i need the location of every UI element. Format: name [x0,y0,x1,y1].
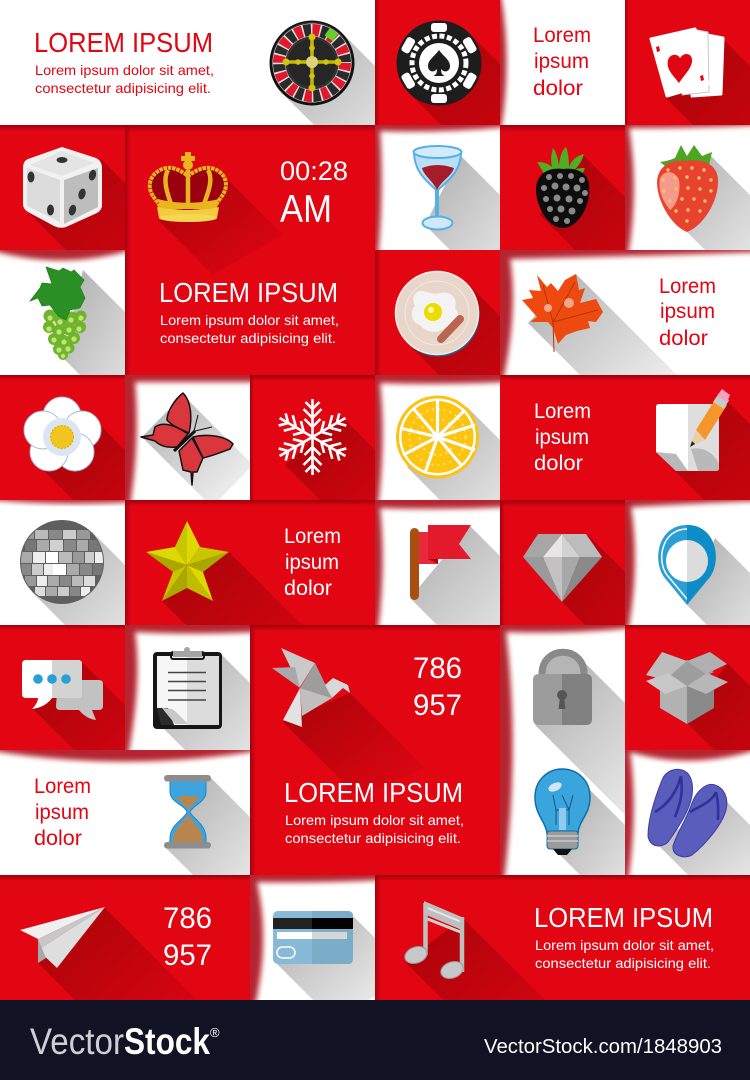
panel: clipboard [125,625,250,750]
title heading: LOREM IPSUM [34,27,213,58]
text block: ipsum [285,551,339,574]
butterfly shadow [142,395,253,507]
bulb shadow [557,788,658,922]
panel: snowflake [250,375,375,500]
panel: grapes [0,250,125,375]
numbers: 957 [413,689,462,722]
pin shadow [687,538,750,675]
panel: butterfly [125,375,250,500]
text block: dolor [534,452,583,475]
icon: map pin [658,525,716,605]
footer bar [0,1000,750,1080]
panel: dice [0,125,125,250]
footer logo [30,1021,220,1062]
footer logo: Stock [124,1021,210,1062]
icon: grapes [30,267,86,360]
icon: flag [410,525,471,600]
icon: disco ball [20,520,104,604]
icon: chat bubbles [22,660,103,720]
sub text [285,812,464,846]
dice shadow [25,160,182,289]
plate shadow [407,283,557,433]
icon: paper plane [20,907,105,968]
icon: roulette wheel [270,20,354,106]
numbers: 786 [413,652,462,685]
panel: star with text [125,500,375,625]
lock shadow [535,663,685,825]
text block: Lorem [284,525,341,548]
subtitle text [35,62,214,96]
box shadow [687,663,750,793]
flower shadow [43,425,180,550]
strawberry shadow [665,155,750,290]
grapes shadow [63,270,163,438]
panel: playing cards [625,0,750,125]
panel: map pin [625,500,750,625]
subtitle text: Lorem ipsum dolor sit amet, [35,62,214,78]
star shadow [162,552,304,676]
panel: lock and light bulb [500,625,625,875]
sub text: consectetur adipisicing elit. [160,330,336,346]
panel: title with roulette [34,20,375,125]
am label: AM [280,188,332,231]
panel: paper plane with numbers [0,875,250,1000]
chat shadow [32,662,152,778]
text block: ipsum [535,426,589,449]
panel: note and pencil [500,375,750,500]
text block: ipsum [534,50,589,73]
flip flop shadow [655,802,750,902]
footer url: VectorStock.com/1848903 [484,1036,722,1058]
blackberry shadow [540,155,663,295]
plane shadow [38,908,205,1063]
icon: lemon [396,396,479,478]
icon: dice [23,147,102,228]
icon: snowflake [275,399,350,475]
sub text: consectetur adipisicing elit. [535,955,711,971]
heading: LOREM IPSUM [284,777,463,808]
footer logo: Vector [30,1021,124,1062]
icon: cardboard box [646,652,728,724]
sub text: Lorem ipsum dolor sit amet, [535,937,714,953]
icon: casino chip [396,20,482,106]
clipboard shadow [157,655,292,792]
roulette shadow [282,33,432,183]
numbers [163,902,212,972]
text block [659,275,716,350]
icon: star [146,521,229,601]
icon: butterfly [141,393,233,485]
numbers: 786 [163,902,212,935]
icon: crown [150,152,226,222]
card shadow [275,913,410,1022]
crown shadow [158,180,283,275]
text block: dolor [659,327,708,350]
numbers [413,652,462,722]
panel: flag [375,500,500,625]
icon: note with pencil [656,389,730,471]
subtitle text: consectetur adipisicing elit. [35,80,211,96]
panel: maple leaf with text [500,250,750,375]
disco shadow [32,532,172,672]
icon: credit card [273,911,353,964]
icon: diamond [523,534,602,602]
panel: blackberry [500,125,625,250]
panel: flip flops [625,750,750,875]
sub text [160,312,339,346]
panel: diamond [500,500,625,625]
icon: flower [24,397,101,471]
sub text: Lorem ipsum dolor sit amet, [160,312,339,328]
text block [34,775,91,850]
text block: Lorem [34,775,91,798]
panel: strawberry [625,125,750,250]
heading: LOREM IPSUM [159,277,338,308]
panel: chat bubbles [0,625,125,750]
text block: dolor [284,577,332,600]
leaf shadow [528,274,676,423]
music note shadow [405,918,573,1072]
icon: hourglass [164,775,211,848]
hourglass shadow [165,777,280,917]
diamond shadow [562,535,658,672]
icon: padlock [533,652,592,725]
icon: origami bird [272,648,350,727]
sub text: Lorem ipsum dolor sit amet, [285,812,464,828]
panel: wine glass [375,125,500,250]
panel: hourglass with text [0,750,250,875]
text block [534,400,591,475]
text block: dolor [34,827,82,850]
icon: flip flops [648,769,727,857]
panel: fried egg plate [375,250,500,375]
snowflake shadow [285,415,400,525]
note shadow [657,402,750,543]
flag shadow [410,526,550,678]
text block: ipsum [660,300,715,323]
panel: origami bird with numbers and title [250,625,500,875]
icon: plate with egg [396,272,480,356]
time: 00:28 [280,156,348,186]
text block: Lorem [533,24,591,47]
chip shadow [409,33,559,183]
panel: crown with time and title [125,125,375,375]
numbers: 957 [163,939,212,972]
icon: music note [402,901,466,981]
panel: music note with title [375,875,750,1000]
sub text [535,937,714,971]
panel: credit card [250,875,375,1000]
panel: lemon [375,375,500,500]
icon: wine glass [414,146,462,230]
panel: flower [0,375,125,500]
icon: clipboard [153,647,222,729]
icon: blackberry [536,147,589,228]
lemon shadow [407,407,547,547]
text block [284,525,341,600]
icon: playing cards [651,29,723,96]
icon: strawberry [657,145,718,232]
panel: lorem ipsum dolor top [500,0,591,125]
text block: dolor [533,77,583,100]
text block: Lorem [534,400,591,423]
text block: Lorem [659,275,716,298]
glass shadow [425,155,540,305]
panel: disco ball [0,500,125,625]
sub text: consectetur adipisicing elit. [285,830,461,846]
panel: casino chip [375,0,500,125]
text block: ipsum [35,801,89,824]
footer logo: ® [210,1025,220,1040]
text block [533,24,591,100]
icon: maple leaf [522,274,603,352]
heading: LOREM IPSUM [534,902,713,933]
icon: light bulb [535,769,590,855]
bird shadow [283,693,425,797]
panel: box [625,625,750,750]
cards shadow [665,40,750,187]
